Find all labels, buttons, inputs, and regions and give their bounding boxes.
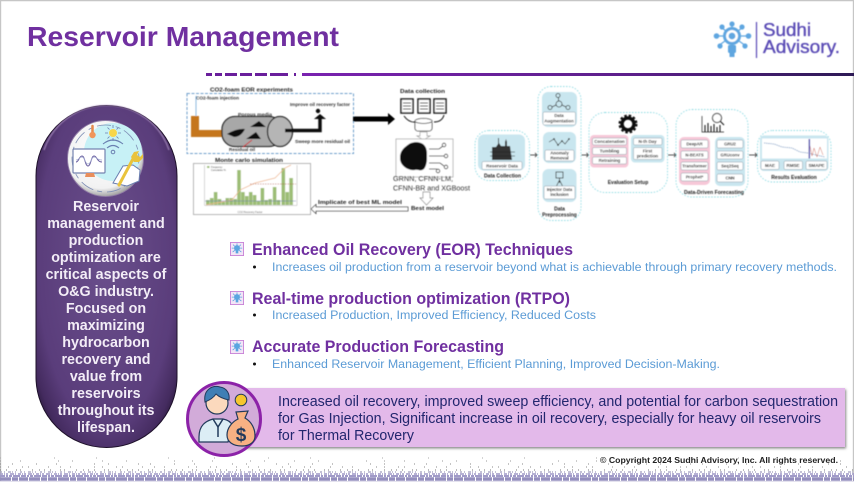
arrow: to best model: [420, 192, 433, 205]
panel: data preprocessing: Preprocessing: [542, 212, 577, 218]
panel: CO2-foam experiment: Porous media: [238, 112, 273, 117]
bar chart: Monte Carlo histogram: [194, 164, 310, 214]
arrow: [668, 153, 676, 157]
label: best model: Best model: [411, 206, 445, 212]
panel: data-driven forecasting: Seq2Seq: [721, 164, 739, 168]
panel: data-driven forecasting: Data-Driven Forecasting: [684, 190, 744, 196]
panel: evaluation setup: Retraining: [599, 158, 621, 163]
arrow: [582, 153, 588, 157]
panel: results evaluation: SMAPE: [808, 163, 825, 168]
panel: CO2-foam experiment: [187, 94, 354, 154]
icon: advisor with money bag: $: [236, 425, 247, 446]
panel: evaluation setup: Concatenation: [594, 139, 625, 144]
copyright: © Copyright 2024 Sudhi Advisory, Inc. All rights reserved.: [600, 455, 838, 465]
callout text: for Thermal Recovery: [278, 428, 415, 444]
heading: Monte Carlo: Monte carlo simulation: [215, 158, 284, 164]
panel: evaluation setup: [589, 112, 668, 192]
model list: CFNN-BR and XGBoost: [393, 184, 470, 192]
capsule text: production: [69, 233, 143, 249]
capsule text: management and: [47, 216, 165, 232]
panel: results evaluation: MAE: [765, 163, 775, 168]
capsule text: recovery and: [61, 352, 151, 368]
section: Enhanced Oil Recovery: Increases oil production from a reservoir beyond what is achievable through primary recovery methods.: [272, 260, 837, 274]
callout text: [278, 394, 838, 444]
model list: [393, 174, 470, 192]
icon: monitoring and maintenance: [68, 120, 144, 196]
panel: CO2-foam experiment: Improve oil recovery factor: [290, 102, 350, 107]
panel: data-driven forecasting: GRU2: [724, 142, 736, 146]
panel: data-driven forecasting: [676, 110, 748, 197]
section: Accurate Production Forecasting: Accurate Production Forecasting: [252, 338, 504, 356]
logo: Sudhi Advisory: Advisory.: [763, 37, 840, 57]
panel: data-driven forecasting: GRUconv: [720, 152, 740, 158]
panel: data collection: Reservoir Data: [486, 164, 518, 168]
capsule text: [46, 199, 167, 436]
heading: data collection: Data collection: [400, 89, 445, 95]
panel: reservoir management capsule: [36, 105, 177, 447]
panel: data preprocessing: Inclusion: [550, 192, 569, 197]
panel: evaluation setup: Evaluation Setup: [608, 180, 648, 186]
panel: data preprocessing: Injector Data: [547, 187, 573, 192]
panel: CO2-foam experiment: Sweep more residual oil: [295, 139, 350, 144]
capsule text: lifespan.: [77, 420, 135, 436]
capsule text: critical aspects of: [46, 267, 167, 283]
arrow: [749, 153, 757, 157]
arrow: [530, 153, 537, 157]
arrow: to data collection: [353, 113, 395, 125]
panel: data-driven forecasting: DeepAR: [686, 142, 703, 146]
icon: bullet bulb: [230, 291, 244, 305]
panel: data collection: [475, 130, 530, 180]
callout text: Increased oil recovery, improved sweep efficiency, and potential for carbon sequestration: [278, 394, 838, 410]
panel: data preprocessing: Data: [554, 113, 564, 118]
panel: data-driven forecasting: CNN: [725, 176, 735, 180]
title rule: [206, 73, 854, 76]
panel: data-driven forecasting: Transformer: [682, 164, 707, 168]
logo: Sudhi Advisory: Sudhi: [763, 20, 811, 40]
capsule text: value from: [70, 369, 142, 385]
capsule text: Focused on: [66, 301, 146, 317]
panel: CO2-foam experiment: Residual oil: [229, 147, 255, 152]
chart: data-driven forecasting pipeline: [475, 86, 831, 220]
section: Accurate Production Forecasting: [230, 338, 720, 371]
bar chart: Monte Carlo histogram: CO2 Recovery Factor: [237, 210, 263, 214]
panel: data collection: Data Collection: [484, 174, 521, 180]
icon: documents and database: [401, 99, 446, 140]
capsule text: maximizing: [67, 318, 145, 334]
icon: advisor with money bag: [188, 382, 260, 456]
panel: evaluation setup: N-th Day: [638, 139, 657, 144]
panel: evaluation setup: prediction: [637, 154, 658, 158]
bar chart: Monte Carlo histogram: Cumulative %: [211, 169, 227, 172]
panel: evaluation setup: Tumbling: [600, 148, 620, 154]
icon: bullet bulb: [230, 242, 244, 256]
panel: data-driven forecasting: Prophet*: [686, 174, 704, 180]
section: Accurate Production Forecasting: Enhanced Reservoir Management, Efficient Planning, Improved Decision-Making.: [272, 357, 720, 371]
arrow: implicate of best ML model: Implicate of best ML model: [318, 200, 403, 206]
logo: Sudhi Advisory: [714, 20, 840, 58]
capsule text: Reservoir: [73, 199, 139, 215]
chart: ML workflow diagram: [187, 88, 470, 214]
callout: benefits: [188, 382, 845, 456]
icon: neural network brain: [396, 139, 453, 177]
icon: light bulb network: [714, 21, 751, 57]
panel: results evaluation: [758, 130, 831, 182]
icon: bullet bulb: [230, 340, 244, 354]
section: Enhanced Oil Recovery: Enhanced Oil Recovery (EOR) Techniques: [252, 241, 573, 259]
panel: results evaluation: Results Evaluation: [771, 175, 817, 181]
capsule text: optimization are: [51, 250, 161, 266]
capsule text: reservoirs: [71, 386, 141, 402]
heading: CO2-foam experiments: CO2-foam EOR experiments: [210, 88, 293, 94]
model list: GRNN, CFNN-LM,: [393, 174, 453, 183]
callout text: for Gas Injection, Significant increase in oil recovery, especially for heavy oil reservoirs: [278, 411, 821, 427]
title: Reservoir Management: [27, 21, 339, 52]
section: Real-time production optimization: [230, 290, 596, 322]
section: Enhanced Oil Recovery: [230, 241, 837, 274]
capsule text: hydrocarbon: [62, 335, 150, 351]
panel: data preprocessing: Augmentation: [544, 118, 574, 124]
section: Real-time production optimization: Real-time production optimization (RTPO): [252, 290, 570, 308]
panel: data preprocessing: Removal: [550, 156, 569, 160]
capsule text: O&G industry.: [58, 284, 154, 300]
panel: data preprocessing: Data: [554, 206, 565, 212]
panel: data preprocessing: Anomaly: [550, 150, 569, 156]
panel: data preprocessing: [538, 86, 581, 220]
footer dot pattern: [0, 458, 854, 482]
panel: data-driven forecasting: N-BEATS: [685, 152, 704, 158]
bar chart: Monte Carlo histogram: Frequency: [211, 166, 223, 169]
panel: evaluation setup: First: [643, 148, 653, 154]
capsule text: throughout its: [58, 403, 154, 419]
panel: CO2-foam experiment: CO2-foam injection: [196, 96, 239, 100]
section: Real-time production optimization: Increased Production, Improved Efficiency, Reduced Costs: [272, 308, 596, 322]
arrow: implicate of best ML model: [311, 200, 408, 214]
panel: results evaluation: RMSE: [786, 163, 800, 168]
